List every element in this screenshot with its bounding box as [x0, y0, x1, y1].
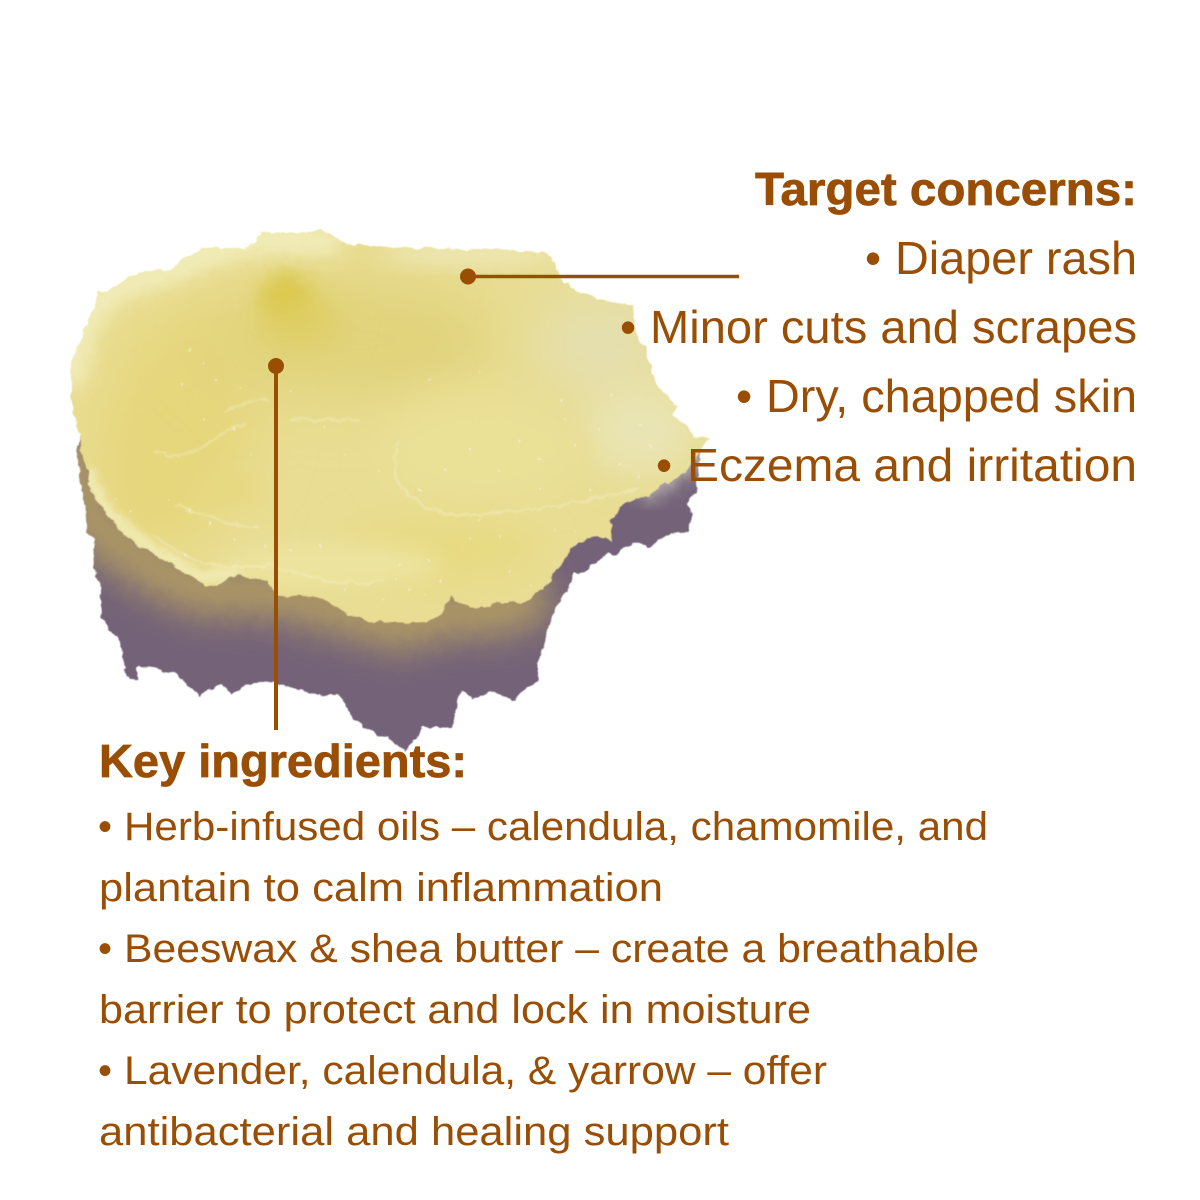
list item: dry, chapped skin: Dry, chapped skin [766, 370, 1137, 422]
ingredient: beeswax and shea butter: • [98, 927, 112, 971]
heading: target concerns: Target concerns: [755, 163, 1137, 215]
list item: dry, chapped skin: • [736, 370, 752, 422]
connector: target concerns [460, 268, 739, 284]
list item: eczema and irritation: Eczema and irritation [687, 439, 1137, 491]
ingredient: lavender, calendula, yarrow: Lavender, calendula, & yarrow – offer [124, 1049, 827, 1093]
ingredient: herb-infused oils: • [98, 805, 112, 849]
list item: minor cuts and scrapes: Minor cuts and scrapes [650, 301, 1137, 353]
connector: key ingredients [268, 358, 284, 730]
ingredient: beeswax and shea butter: barrier to protect and lock in moisture [99, 988, 811, 1032]
ingredient: lavender, calendula, yarrow: • [98, 1049, 112, 1093]
balm shadow [76, 436, 701, 752]
panel: target concerns [620, 163, 1137, 491]
list item: eczema and irritation: • [656, 439, 672, 491]
ingredient: beeswax and shea butter [98, 927, 979, 1032]
panel: key ingredients [98, 735, 988, 1154]
list item: diaper rash: • [865, 232, 881, 284]
heading: key ingredients: Key ingredients: [99, 735, 467, 787]
ingredient: herb-infused oils: Herb-infused oils – calendula, chamomile, and [124, 805, 988, 849]
list item: minor cuts and scrapes: • [620, 301, 636, 353]
ingredient: herb-infused oils [98, 805, 988, 910]
balm sparkles [115, 350, 650, 600]
image: balm swatch with shadow [60, 220, 720, 760]
balm surface ridges [155, 400, 640, 583]
ingredient: lavender, calendula, yarrow: antibacterial and healing support [99, 1110, 729, 1154]
balm body [60, 220, 720, 640]
list item: diaper rash: Diaper rash [895, 232, 1137, 284]
ingredient: herb-infused oils: plantain to calm inflammation [99, 866, 663, 910]
ingredient: beeswax and shea butter: Beeswax & shea butter – create a breathable [124, 927, 979, 971]
ingredient: lavender, calendula, yarrow [98, 1049, 827, 1154]
